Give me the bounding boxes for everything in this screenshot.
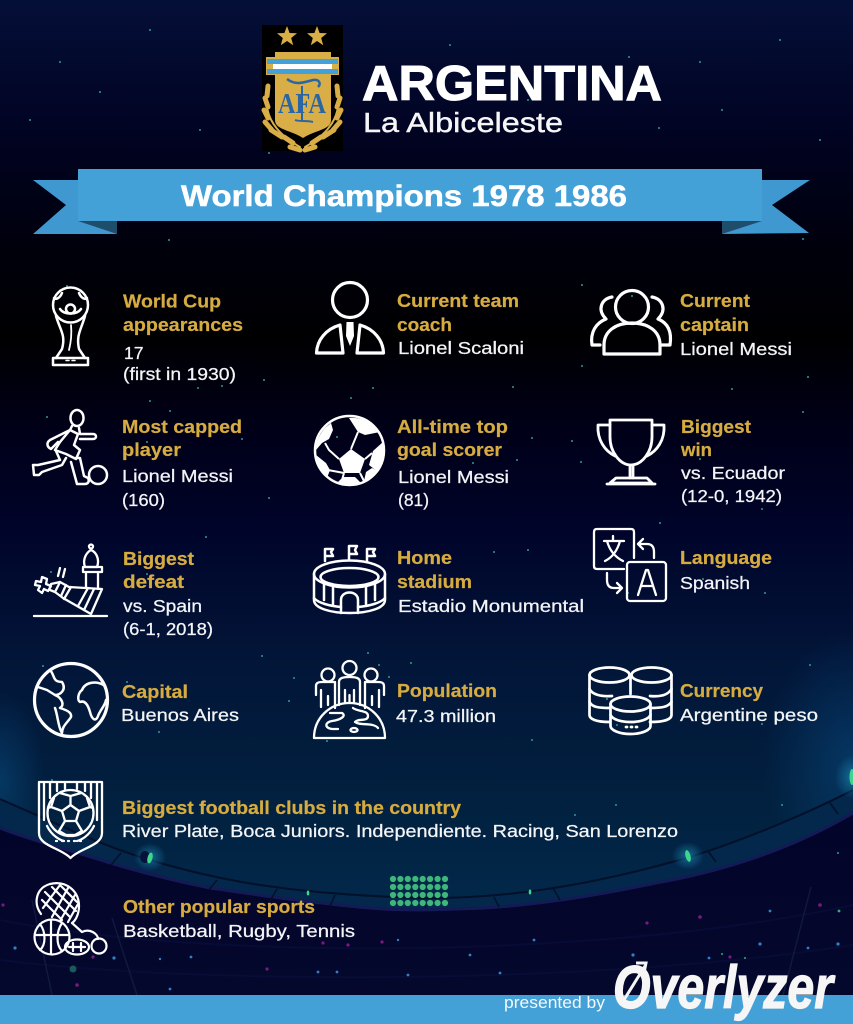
label: Most capped xyxy=(122,417,242,437)
item: Currency xyxy=(590,668,818,734)
brand arrow xyxy=(622,963,646,1003)
icon: trophy cup xyxy=(598,420,664,484)
crest stars xyxy=(277,26,327,45)
value: Lionel Messi xyxy=(398,467,509,487)
value: vs. Spain xyxy=(123,596,202,616)
icon: soccer ball xyxy=(315,416,384,485)
item: Home stadium: stadium xyxy=(397,572,472,592)
item: Biggest win: win xyxy=(680,440,712,460)
icon: coach in suit xyxy=(316,282,384,353)
item: Current team coach xyxy=(316,282,524,358)
label: Biggest xyxy=(123,549,194,569)
item: Biggest defeat: defeat xyxy=(123,572,184,592)
footer: presented by Overlyzer xyxy=(504,954,836,1021)
item: Other popular sports xyxy=(34,883,355,954)
label: Home xyxy=(397,548,452,568)
value: 17 xyxy=(124,343,143,363)
value: Buenos Aires xyxy=(121,705,239,725)
label: Capital xyxy=(122,682,188,702)
item: World Cup appearances xyxy=(53,288,243,384)
background: stadium roof and stands xyxy=(0,790,853,1024)
item: Current captain xyxy=(592,290,792,359)
label: Population xyxy=(397,681,497,701)
bottom bar xyxy=(0,995,853,1024)
item: Current team coach: coach xyxy=(397,315,452,335)
subtitle: La Albiceleste xyxy=(363,107,563,138)
value: vs. Ecuador xyxy=(681,463,785,483)
presented by: presented by xyxy=(504,994,606,1012)
background stars xyxy=(29,29,839,854)
stadium light board xyxy=(390,876,448,906)
logo: AFA crest xyxy=(262,25,343,151)
value: Lionel Scaloni xyxy=(398,338,524,358)
item: All-time top goal scorer xyxy=(315,416,509,510)
item: Biggest football clubs xyxy=(39,782,678,858)
label: All-time top xyxy=(397,417,508,437)
label: Language xyxy=(680,548,772,568)
label: Biggest football clubs in the country xyxy=(122,798,461,818)
icon: people on globe xyxy=(314,661,385,738)
item: Language xyxy=(594,529,772,601)
icon: captain group xyxy=(592,290,670,354)
value: 47.3 million xyxy=(396,706,496,726)
value: Basketball, Rugby, Tennis xyxy=(123,921,355,941)
icon: fallen chess king xyxy=(34,544,107,616)
label: Current xyxy=(680,291,750,311)
stadium floodlights xyxy=(134,755,853,896)
icon: coin stacks xyxy=(590,668,672,734)
item: Most capped player: (160) xyxy=(122,490,165,510)
icon: stadium xyxy=(314,546,385,613)
value: Spanish xyxy=(680,573,750,593)
item: World Cup appearances: appearances xyxy=(123,315,243,335)
icon: football club shield xyxy=(39,782,102,858)
icon: racket and balls xyxy=(34,883,106,954)
value: Argentine peso xyxy=(680,705,818,725)
item: Home stadium xyxy=(314,546,584,616)
item: Biggest win: (12-0, 1942) xyxy=(681,486,782,506)
icon: translate xyxy=(594,529,666,601)
banner text: World Champions 1978 1986 xyxy=(181,180,627,213)
item: Most capped player: player xyxy=(122,440,181,460)
item: Current captain: captain xyxy=(680,315,749,335)
icon: globe xyxy=(34,664,108,736)
item: All-time top goal scorer: (81) xyxy=(398,490,429,510)
arena lights: blue dots xyxy=(13,910,840,990)
crest band xyxy=(266,57,339,75)
icon: world cup trophy xyxy=(53,288,88,365)
label: Currency xyxy=(680,681,763,701)
banner ribbon xyxy=(33,169,810,234)
item: Most capped player xyxy=(33,410,242,510)
label: World Cup xyxy=(123,292,221,312)
label: Other popular sports xyxy=(123,897,315,917)
value: Lionel Messi xyxy=(680,339,792,359)
arena lights: magenta and green dots xyxy=(1,903,840,987)
value: River Plate, Boca Juniors. Independiente. Racing, San Lorenzo xyxy=(122,821,678,841)
crest shield xyxy=(275,52,331,138)
label: Biggest xyxy=(681,417,751,437)
crest monogram: AFA xyxy=(278,88,326,120)
item: Capital xyxy=(34,664,239,736)
item: All-time top goal scorer: goal scorer xyxy=(397,440,502,460)
value: Lionel Messi xyxy=(122,466,233,486)
icon: footballer kicking ball xyxy=(33,410,107,484)
label: Current team xyxy=(397,291,519,311)
item: Population xyxy=(314,661,497,738)
item: Biggest win xyxy=(598,417,785,506)
crest laurel xyxy=(264,86,341,150)
value: Estadio Monumental xyxy=(398,596,584,616)
item: Biggest defeat: (6-1, 2018) xyxy=(123,619,213,639)
item: World Cup appearances: (first in 1930) xyxy=(123,364,236,384)
title: ARGENTINA xyxy=(362,57,662,111)
item: Biggest defeat xyxy=(34,544,213,639)
